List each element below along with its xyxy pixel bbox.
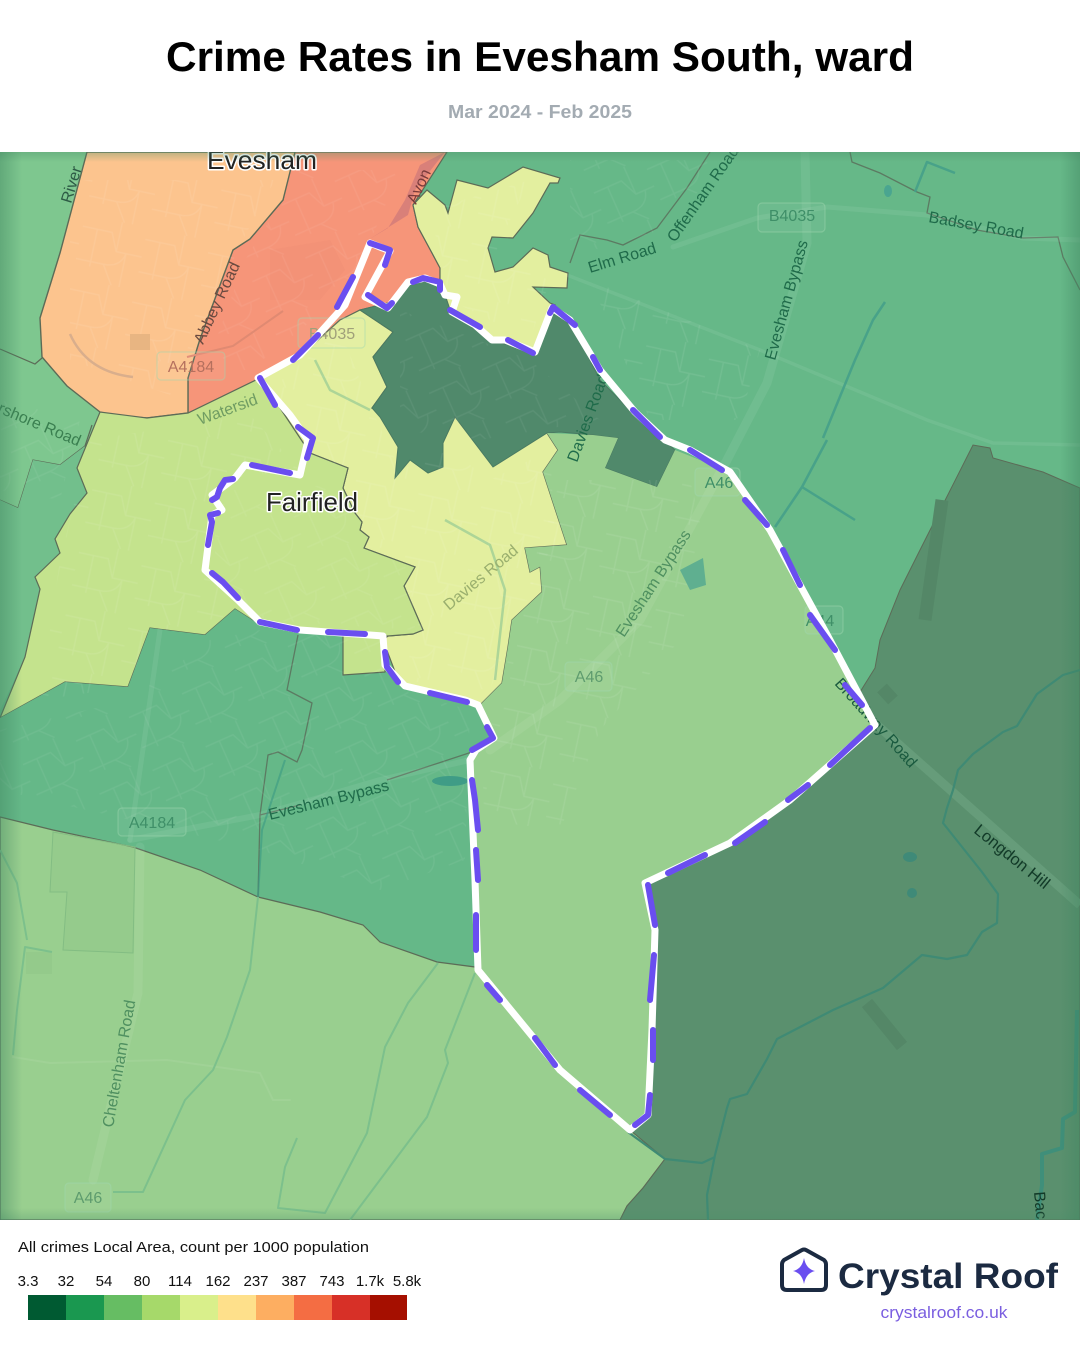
road shield: A46 south: A46 (74, 1190, 102, 1207)
area: orange high crime (40, 152, 295, 418)
road label: Offenham Road: Offenham Road (664, 143, 743, 245)
road label: Elm Road: Elm Road (586, 240, 658, 277)
area: dark green east (620, 445, 1080, 1220)
map edge shading (0, 152, 1080, 1220)
road shield: A46 south (65, 1183, 111, 1212)
fields south-west (50, 832, 135, 953)
road label: Davies Road north: Davies Road (565, 372, 612, 464)
road label: Broadway Road: Broadway Road (831, 675, 920, 771)
road shield: A46 upper: A46 (705, 475, 733, 492)
icon: house with star (782, 1250, 826, 1290)
legend values: 5.8k (393, 1273, 422, 1290)
ward boundary: Evesham South (205, 243, 875, 1130)
place label: Evesham: Evesham (207, 145, 317, 175)
legend values: 32 (58, 1273, 74, 1290)
area: south-west mid green (0, 609, 489, 737)
title: Crime Rates in Evesham South, ward (166, 33, 914, 80)
road shield: A4184 north (157, 352, 225, 380)
road label: Davies Road south: Davies Road (441, 542, 522, 614)
road: Broadway Road and Longdon Hill (877, 725, 1080, 905)
place label: Fairfield: Fairfield (266, 487, 358, 517)
road shield: B4035 central: B4035 (309, 326, 355, 343)
street texture (0, 160, 760, 890)
main roads (118, 158, 1068, 1062)
road label: River: River (59, 164, 86, 205)
area: dark green low crime north (360, 280, 675, 487)
road label: Bac: Bac (1030, 1191, 1049, 1220)
road label: Evesham Bypass centre: Evesham Bypass (613, 527, 695, 640)
building in orange area (130, 334, 150, 350)
legend values: 162 (205, 1273, 231, 1290)
road shield: A4184 north: A4184 (168, 359, 214, 376)
legend values: 237 (243, 1273, 269, 1290)
river label: Avon: Avon (404, 167, 435, 207)
map base: mid green area (0, 152, 1080, 737)
legend title: All crimes Local Area, count per 1000 population (18, 1239, 369, 1256)
road shield: A4184 south: A4184 (129, 815, 175, 832)
legend values: 54 (96, 1273, 112, 1290)
legend values: 114 (168, 1273, 192, 1290)
road label: Waterside: Watersid (196, 391, 260, 429)
area: top small light green (335, 152, 398, 166)
strips east (867, 500, 942, 1046)
road shield: B4035 north: B4035 (769, 208, 815, 225)
road shield: B4035 central (298, 318, 365, 348)
choropleth map (0, 143, 1080, 1220)
road shield: A44: A44 (806, 613, 834, 630)
river through town centre (368, 152, 445, 240)
road shield: A44 (805, 606, 843, 634)
field boundaries (258, 152, 1080, 897)
road label: Cheltenham Road: Cheltenham Road (100, 999, 139, 1129)
area: salmon town centre (188, 152, 447, 413)
road label: Evesham Bypass south: Evesham Bypass (267, 777, 391, 824)
legend values: 80 (134, 1273, 150, 1290)
logo: Crystal Roof (782, 1250, 1058, 1322)
field fill south-west of Pershore Road (0, 446, 87, 710)
road label: Evesham Bypass north: Evesham Bypass (762, 238, 812, 362)
area: small lime block (343, 636, 385, 675)
area: light green south-east of ward (470, 433, 875, 1130)
road shield: A46 upper (695, 468, 740, 496)
logo URL: crystalroof.co.uk (880, 1303, 1008, 1322)
road label: Badsey Road: Badsey Road (927, 209, 1025, 243)
area: south-west light green (0, 817, 665, 1220)
road label: Abbey Road: Abbey Road (191, 260, 244, 347)
field boundaries north-west (0, 349, 92, 508)
area: central yellow (260, 310, 567, 707)
road: Abbey Road curve (70, 334, 133, 377)
subtitle: date range: Mar 2024 - Feb 2025 (448, 102, 632, 122)
road shield: B4035 north (758, 203, 825, 232)
legend values: 387 (281, 1273, 307, 1290)
legend colour scale (28, 1295, 407, 1320)
ponds (432, 185, 917, 898)
road shield: A4184 south (118, 808, 186, 836)
paddock south-west (26, 952, 52, 974)
streams (0, 162, 1080, 1220)
area: north yellow (410, 167, 568, 352)
urban texture in town centre (270, 240, 345, 300)
legend (18, 1239, 422, 1320)
legend values: 743 (319, 1273, 345, 1290)
legend values (18, 1273, 422, 1290)
area: north-west light green (0, 152, 99, 507)
logo wordmark: Crystal Roof (838, 1257, 1058, 1296)
road in salmon area (187, 311, 283, 357)
area: west lime including Fairfield (0, 378, 423, 718)
legend values: 1.7k (356, 1273, 385, 1290)
road shield: A46 centre (565, 662, 612, 691)
legend values: 3.3 (18, 1273, 38, 1290)
road shield: A46 centre: A46 (575, 669, 603, 686)
road label: Longdon Hill: Longdon Hill (970, 821, 1053, 893)
